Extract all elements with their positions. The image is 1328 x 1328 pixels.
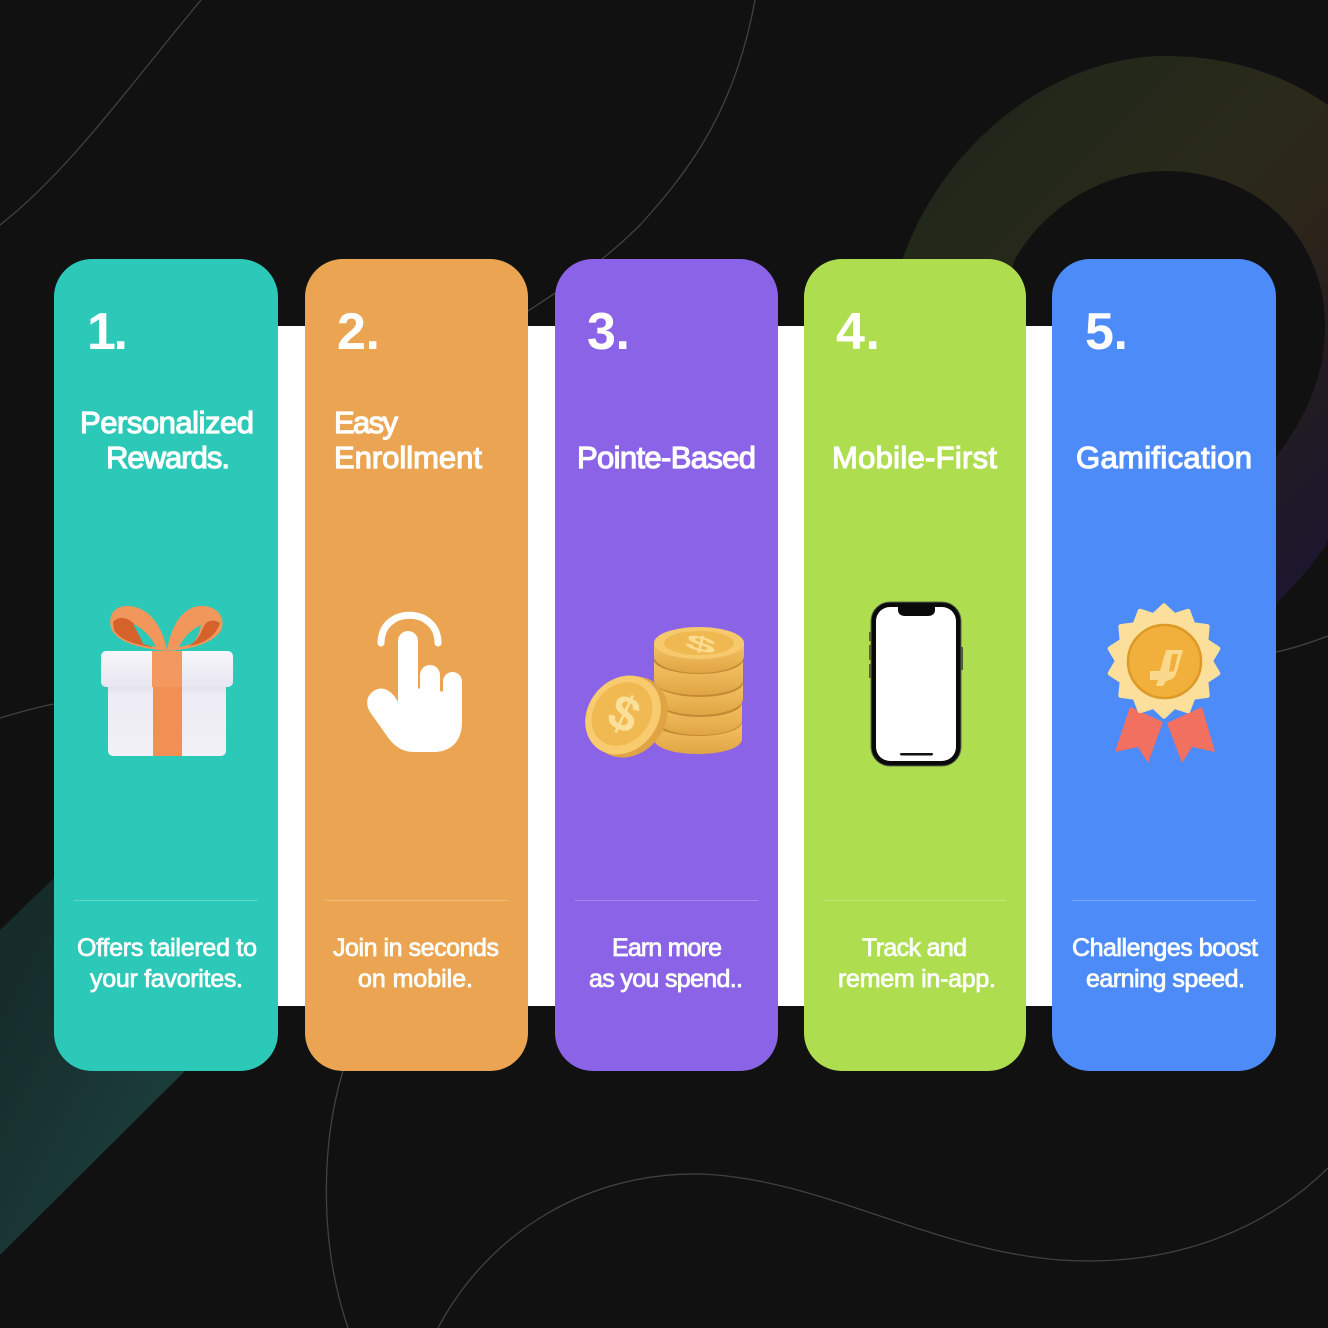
step number 5: 5. bbox=[1085, 303, 1128, 361]
dollar sign on stack: $ bbox=[683, 629, 719, 659]
description: your favorites. bbox=[90, 965, 243, 993]
description: Offers tailered to bbox=[77, 934, 257, 962]
description bbox=[1072, 934, 1258, 993]
description: remem in-app. bbox=[838, 965, 996, 993]
description: as you spend.. bbox=[589, 965, 743, 993]
description bbox=[333, 934, 499, 993]
description: Earn more bbox=[612, 934, 722, 962]
description: on mobile. bbox=[358, 965, 473, 993]
heading: easy enrollment: Enrollment bbox=[334, 440, 482, 475]
heading: personalized rewards: Personalized bbox=[80, 405, 254, 440]
divider bbox=[325, 900, 508, 901]
background swirl ring bbox=[885, 56, 1328, 640]
white backing band bbox=[270, 326, 1060, 1006]
divider bbox=[575, 900, 758, 901]
step number 3: 3. bbox=[587, 303, 630, 361]
heading: personalized rewards: Rewards. bbox=[106, 440, 230, 475]
step number 1: 1. bbox=[87, 303, 128, 361]
description bbox=[77, 934, 257, 993]
icon: smartphone bbox=[869, 602, 963, 766]
background teal band bbox=[0, 878, 200, 1255]
description: Join in seconds bbox=[333, 934, 499, 962]
description: earning speed. bbox=[1086, 965, 1245, 993]
icon: medal bbox=[1110, 606, 1218, 763]
icon: gift box bbox=[101, 606, 233, 756]
panel: card 3 points-based bbox=[555, 259, 778, 1071]
description: Challenges boost bbox=[1072, 934, 1258, 962]
step number 2: 2. bbox=[337, 303, 380, 361]
heading: mobile-first: Mobile-First bbox=[832, 440, 997, 475]
dollar sign on coin: $ bbox=[600, 682, 649, 745]
panel: card 2 easy enrollment bbox=[305, 259, 528, 1071]
step number 4: 4. bbox=[836, 303, 880, 361]
icon: coin stack bbox=[570, 627, 744, 773]
description bbox=[589, 934, 743, 993]
divider bbox=[1072, 900, 1256, 901]
divider bbox=[74, 900, 258, 901]
panel: card 1 personalized rewards bbox=[54, 259, 278, 1071]
heading: gamification: Gamification bbox=[1076, 440, 1252, 475]
heading: points-based: Pointe-Based bbox=[577, 440, 756, 475]
heading: easy enrollment bbox=[334, 405, 482, 475]
heading: easy enrollment: Easy bbox=[334, 405, 398, 440]
panel: card 5 gamification bbox=[1052, 259, 1276, 1071]
description bbox=[838, 934, 996, 993]
divider bbox=[824, 900, 1006, 901]
description: Track and bbox=[862, 934, 967, 962]
heading: personalized rewards bbox=[80, 405, 254, 475]
icon: tapping hand bbox=[367, 615, 462, 752]
panel: card 4 mobile-first bbox=[804, 259, 1026, 1071]
